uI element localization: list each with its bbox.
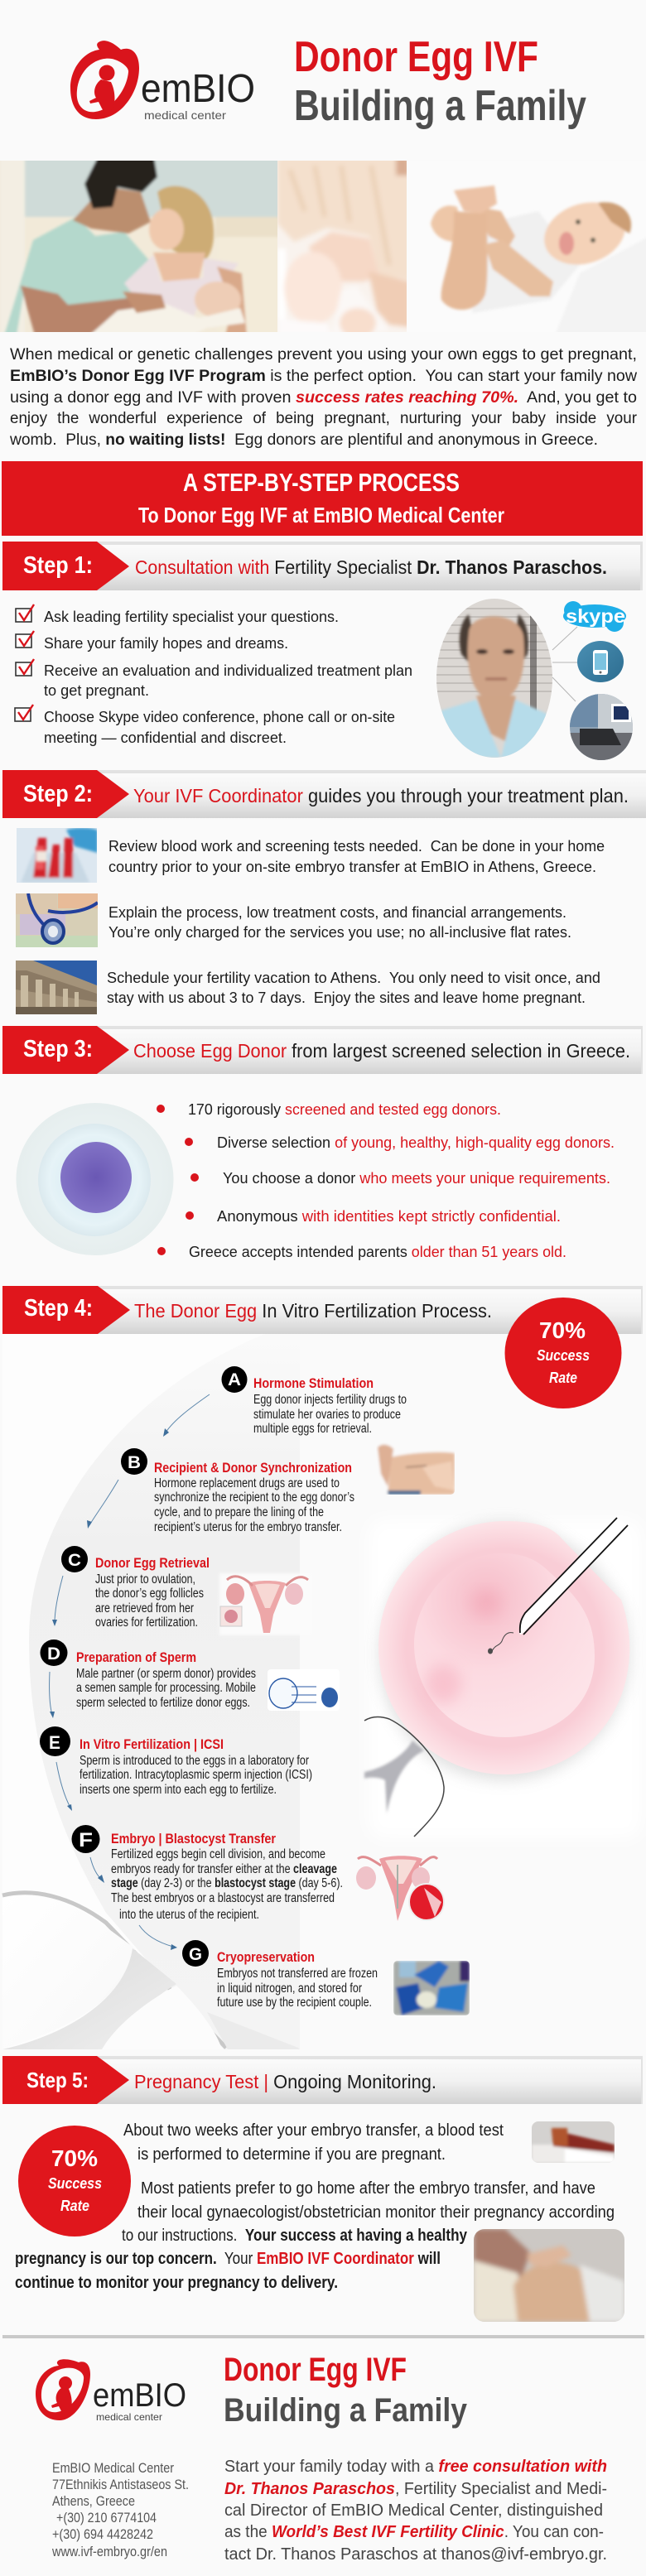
stage D: preparation of sperm xyxy=(40,1639,256,1710)
title: Donor Egg IVF xyxy=(294,33,538,81)
intro text xyxy=(9,346,638,449)
badge: 70% success rate: 70% xyxy=(51,2145,98,2171)
stage F: embryo transfer: Embryo | Blastocyst Transfer xyxy=(111,1832,276,1847)
badge: 70% success rate: Success xyxy=(537,1347,590,1364)
text: vacation xyxy=(107,969,600,1006)
stage A: hormone stimulation: Egg donor injects fertility drugs to xyxy=(253,1393,407,1407)
step 2 header: Your IVF Coordinator guides you through your treatment plan. xyxy=(133,785,629,807)
check item 3: to get pregnant. xyxy=(44,681,149,699)
stage G: cryopreservation: Embryos not transferred are frozen xyxy=(217,1967,378,1981)
arrow A to B xyxy=(163,1394,210,1437)
step 3 header: Step 3: xyxy=(23,1036,93,1062)
stage B: synchronization: recipient’s uterus for the embryo transfer. xyxy=(154,1520,342,1534)
banner: step-by-step process: A STEP-BY-STEP PROCESS xyxy=(183,468,460,497)
stage A: hormone stimulation: Hormone Stimulation xyxy=(253,1376,374,1391)
pregnancy test text xyxy=(15,2121,615,2292)
pregnancy test text: About two weeks after your embryo transfer, a blood test xyxy=(123,2121,504,2140)
footer paragraph: tact Dr. Thanos Paraschos at thanos@ivf-embryo.gr. xyxy=(224,2545,607,2564)
step 5 header: Pregnancy Test | Ongoing Monitoring. xyxy=(134,2071,436,2092)
check item 4: Choose Skype video conference, phone call or on-site xyxy=(44,708,395,725)
footer address xyxy=(51,2460,189,2559)
stage F: embryo transfer: stage (day 2-3) or the blastocyst stage (day 5-6). xyxy=(111,1876,343,1890)
stage C: egg retrieval: Donor Egg Retrieval xyxy=(95,1556,210,1571)
pregnancy test text: Most patients prefer to go home after the embryo transfer, and have xyxy=(141,2179,595,2198)
text: vacation: stay with us about 3 to 7 days. Enjoy the sites and leave home pregnant. xyxy=(107,989,586,1006)
footer address: www.ivf-embryo.gr/en xyxy=(51,2544,167,2559)
footer address: +(30) 694 4428242 xyxy=(52,2526,153,2542)
stage D: preparation of sperm: D xyxy=(47,1644,60,1664)
header xyxy=(70,33,586,130)
bullet 2: Diverse selection of young, healthy, high-quality egg donors. xyxy=(217,1134,615,1151)
stage E: IVF / ICSI: fertilization. Intracytoplasmic sperm injection (ICSI) xyxy=(80,1768,312,1782)
text: blood work xyxy=(108,837,605,875)
text: blood work: country prior to your on-site embryo transfer at EmBIO in Athens, Greece. xyxy=(108,858,596,875)
step 1 checklist xyxy=(15,604,412,746)
photo: laughing baby xyxy=(429,184,633,311)
stage A: hormone stimulation: stimulate her ovaries to produce xyxy=(253,1408,401,1422)
stage F: embryo transfer: The best embryos or a blastocyst are transferred xyxy=(111,1891,335,1905)
stage E: IVF / ICSI: Sperm is introduced to the eggs in a laboratory for xyxy=(80,1754,309,1768)
bullet 5: Greece accepts intended parents older than 51 years old. xyxy=(189,1243,566,1260)
intro text: When medical or genetic challenges prevent you using your own eggs to get pregnant, xyxy=(10,346,637,364)
stage A: hormone stimulation: multiple eggs for retrieval. xyxy=(253,1422,372,1436)
footer paragraph: as the World’s Best IVF Fertility Clinic. You can con- xyxy=(224,2523,604,2541)
stage F: embryo transfer: F xyxy=(79,1829,93,1851)
thumbnail: blood tubes xyxy=(17,828,98,883)
footer address: EmBIO Medical Center xyxy=(52,2460,174,2476)
stage E: IVF / ICSI xyxy=(40,1726,312,1797)
thumbnail: stethoscope on euros xyxy=(16,893,98,947)
stage F: embryo transfer: embryos ready for transfer either at the cleavage xyxy=(111,1862,337,1876)
photo: mother and baby xyxy=(277,157,410,338)
image: sperm selection xyxy=(268,1669,340,1711)
intro text: EmBIO’s Donor Egg IVF Program is the perfect option. You can start your family now xyxy=(10,368,637,385)
text: blood work: Review blood work and screening tests needed. Can be done in your home xyxy=(108,837,605,855)
image: abdominal injection xyxy=(376,1442,455,1495)
stage D: preparation of sperm: sperm selected to fertilize donor eggs. xyxy=(76,1696,250,1710)
title xyxy=(294,33,586,130)
stage E: IVF / ICSI: inserts one sperm into each egg to fertilize. xyxy=(80,1783,277,1797)
stage C: egg retrieval: Just prior to ovulation, xyxy=(95,1572,195,1587)
check item 4 xyxy=(15,705,395,746)
divider xyxy=(2,2335,644,2338)
text: costs: You’re only charged for the services you use; no all-inclusive flat rates. xyxy=(108,923,571,941)
stage C: egg retrieval xyxy=(61,1546,210,1630)
badge: 70% success rate xyxy=(18,2126,131,2237)
image: liquid nitrogen storage xyxy=(393,1961,470,2015)
stage B: synchronization: synchronize the recipient to the egg donor’s xyxy=(154,1490,354,1505)
image: uterus with follicles xyxy=(219,1573,312,1635)
stage E: IVF / ICSI: In Vitro Fertilization | ICSI xyxy=(80,1737,224,1752)
stage C: egg retrieval: the donor’s egg follicles xyxy=(95,1587,204,1601)
arrow F to G xyxy=(139,1925,177,1950)
arrow C to D xyxy=(52,1576,63,1626)
stage B: synchronization: cycle, and to prepare the lining of the xyxy=(154,1505,324,1519)
pregnancy test text: continue to monitor your pregnancy to delivery. xyxy=(15,2274,338,2292)
step 3 header: Choose Egg Donor from largest screened selection in Greece. xyxy=(133,1040,630,1062)
photo: couple with newborn xyxy=(0,157,283,336)
footer title: Building a Family xyxy=(224,2392,468,2429)
illustration: ICSI egg injection xyxy=(364,1518,642,1838)
thumbnail: parthenon xyxy=(16,961,97,1014)
icon: phone xyxy=(577,641,624,682)
check item 3 xyxy=(16,659,412,699)
stage D: preparation of sperm: Preparation of Sperm xyxy=(76,1650,196,1665)
bullet 3: You choose a donor who meets your unique requirements. xyxy=(223,1169,610,1187)
connector lines xyxy=(552,627,578,701)
footer address: +(30) 210 6774104 xyxy=(56,2510,157,2525)
stage C: egg retrieval: are retrieved from her xyxy=(95,1601,194,1615)
footer paragraph: cal Director of EmBIO Medical Center, distinguished xyxy=(224,2501,603,2520)
icon: on-site meeting room xyxy=(570,694,633,760)
pregnancy test text: their local gynaecologist/obstetrician monitor their pregnancy according xyxy=(137,2203,615,2222)
footer address: Athens, Greece xyxy=(52,2493,135,2509)
stage G: cryopreservation: future use by the recipient couple. xyxy=(217,1996,372,2010)
stage G: cryopreservation xyxy=(182,1940,378,2010)
footer logo: emBIO: medical center xyxy=(96,2411,162,2423)
stage D: preparation of sperm: a semen sample for processing. Mobile xyxy=(76,1681,256,1695)
banner: step-by-step process xyxy=(2,461,643,536)
stage E: IVF / ICSI: E xyxy=(49,1732,60,1753)
stage B: synchronization: Hormone replacement drugs are used to xyxy=(154,1476,340,1490)
icon: skype: skype xyxy=(566,605,625,627)
logo: emBIO xyxy=(70,41,255,122)
arrow D to E xyxy=(50,1672,55,1718)
step 2 header: Step 2: xyxy=(23,781,93,807)
text: vacation: Schedule your fertility vacation to Athens. You only need to visit once, and xyxy=(107,969,600,986)
step 4 background arcs xyxy=(2,1334,300,2049)
bullet 4: Anonymous with identities kept strictly confidential. xyxy=(217,1207,561,1225)
stage A: hormone stimulation xyxy=(222,1366,407,1436)
stage G: cryopreservation: G xyxy=(189,1945,202,1964)
arrow E to F xyxy=(56,1762,72,1811)
stage C: egg retrieval: C xyxy=(68,1551,81,1570)
footer title: Donor Egg IVF xyxy=(224,2352,407,2388)
step 5 header: Step 5: xyxy=(27,2068,89,2092)
badge: 70% success rate: 70% xyxy=(539,1317,586,1343)
stage A: hormone stimulation: A xyxy=(228,1370,241,1389)
illustration: egg cell xyxy=(17,1103,174,1255)
footer address: 77Ethnikis Antistaseos St. xyxy=(52,2477,189,2492)
stage G: cryopreservation: Cryopreservation xyxy=(217,1950,315,1965)
text: costs: Explain the process, low treatment costs, and financial arrangements. xyxy=(108,903,566,921)
badge: 70% success rate xyxy=(505,1298,621,1408)
footer logo: emBIO xyxy=(36,2359,186,2423)
step 1 header xyxy=(2,542,643,590)
footer title xyxy=(224,2352,468,2429)
banner: step-by-step process: To Donor Egg IVF at EmBIO Medical Center xyxy=(138,503,504,527)
intro text: enjoy the wonderful experience of being pregnant, nurturing your baby inside your xyxy=(10,410,638,427)
stage F: embryo transfer xyxy=(71,1825,343,1922)
step 1 header: Step 1: xyxy=(23,552,93,579)
arrow B to C xyxy=(87,1480,118,1529)
step 5 header xyxy=(2,2056,643,2104)
footer logo: emBIO: emBIO xyxy=(93,2377,186,2414)
bullet 1: 170 rigorously screened and tested egg donors. xyxy=(188,1100,501,1118)
step 4 header: Step 4: xyxy=(24,1295,93,1322)
image: blood test tube xyxy=(532,2121,615,2163)
portrait: Dr. Thanos Paraschos xyxy=(436,599,552,758)
icon: skype xyxy=(563,601,626,632)
check item 4: meeting — confidential and discreet. xyxy=(44,729,287,746)
step 3 header xyxy=(2,1026,643,1074)
check item 3: Receive an evaluation and individualized treatment plan xyxy=(44,662,412,679)
step 4 header xyxy=(2,1286,643,1334)
step 4 header: The Donor Egg In Vitro Fertilization Process. xyxy=(134,1300,492,1322)
stage G: cryopreservation: in liquid nitrogen, and stored for xyxy=(217,1981,362,1996)
stage F: embryo transfer: into the uterus of the recipient. xyxy=(119,1908,259,1922)
pregnancy test text: pregnancy is our top concern. Your EmBIO IVF Coordinator will xyxy=(15,2250,441,2268)
stage C: egg retrieval: ovaries for fertilization. xyxy=(95,1615,198,1630)
sperm xyxy=(488,1633,513,1654)
donor bullet list xyxy=(157,1100,615,1260)
intro text: using a donor egg and IVF with proven success rates reaching 70%. And, you get to xyxy=(10,389,637,407)
stage B: synchronization: Recipient & Donor Synchronization xyxy=(154,1461,352,1476)
stage B: synchronization: B xyxy=(128,1453,141,1472)
text: costs xyxy=(108,903,571,941)
stage B: synchronization xyxy=(121,1448,354,1534)
footer paragraph: Start your family today with a free consultation with xyxy=(224,2458,607,2476)
check item 2: Share your family hopes and dreams. xyxy=(44,634,288,652)
logo: emBIO: medical center xyxy=(144,108,226,122)
image: uterus with embryo xyxy=(356,1856,444,1921)
stage F: embryo transfer: Fertilized eggs begin cell division, and become xyxy=(111,1847,325,1861)
badge: 70% success rate: Success xyxy=(48,2175,102,2192)
step 1 header: Consultation with Fertility Specialist Dr. Thanos Paraschos. xyxy=(135,556,607,578)
arrow F xyxy=(90,1857,104,1883)
check item 1: Ask leading fertility specialist your questions. xyxy=(44,608,339,625)
footer paragraph xyxy=(224,2458,607,2564)
image: pregnant belly xyxy=(474,2229,624,2322)
micropipette xyxy=(519,1518,628,1635)
badge: 70% success rate: Rate xyxy=(549,1370,577,1386)
step 2 header xyxy=(2,770,646,818)
pregnancy test text: to our instructions. Your success at having a healthy xyxy=(122,2227,468,2245)
pregnancy test text: is performed to determine if you are pregnant. xyxy=(137,2145,446,2164)
intro text: womb. Plus, no waiting lists! Egg donors are plentiful and anonymous in Greece. xyxy=(9,431,598,449)
logo: emBIO: emBIO xyxy=(141,67,255,111)
title: Building a Family xyxy=(294,82,586,130)
badge: 70% success rate: Rate xyxy=(60,2198,89,2214)
footer paragraph: Dr. Thanos Paraschos, Fertility Specialist and Medi- xyxy=(224,2480,607,2498)
stage D: preparation of sperm: Male partner (or sperm donor) provides xyxy=(76,1667,256,1681)
